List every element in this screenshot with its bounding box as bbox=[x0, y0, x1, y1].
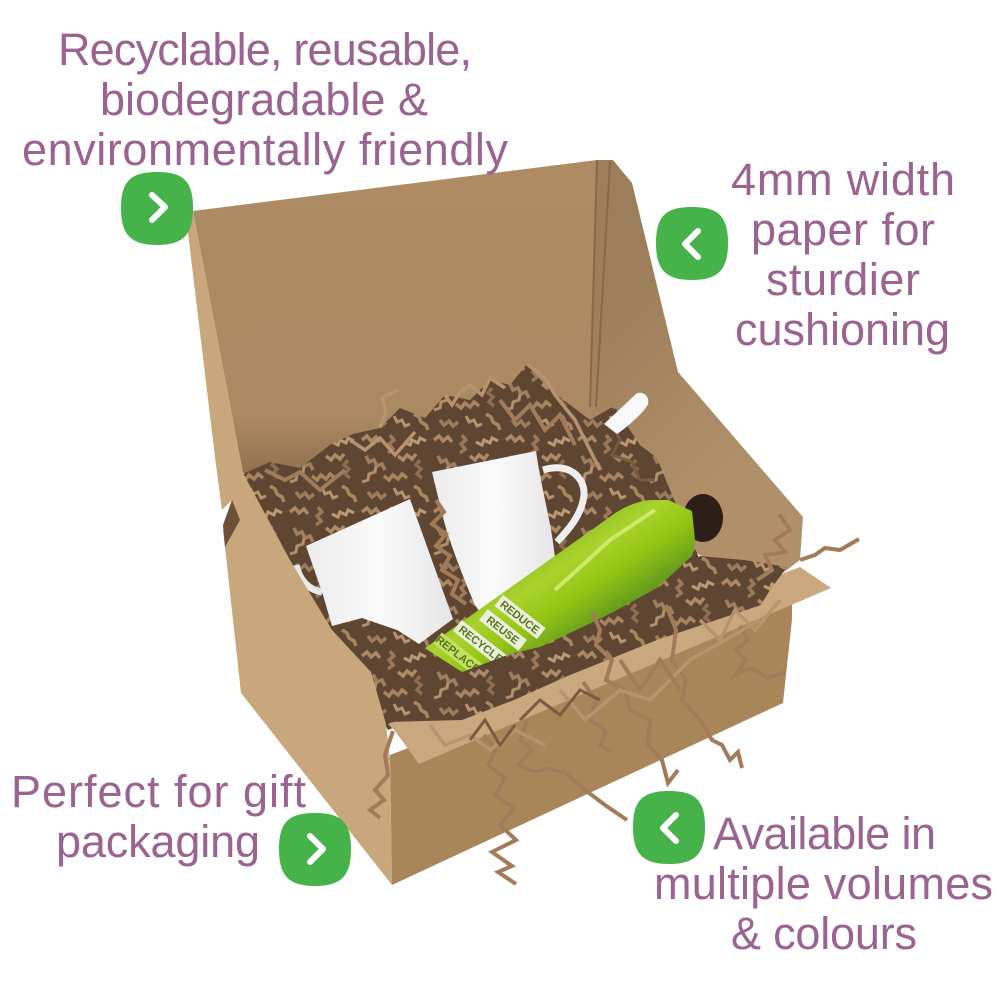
icon: arrow right bbox=[279, 813, 351, 886]
spoon handle bbox=[604, 393, 648, 434]
box front flap bbox=[388, 567, 831, 764]
bottle labels: REDUCE bbox=[497, 599, 541, 637]
callout: paper width: sturdier bbox=[766, 254, 920, 305]
side notch bbox=[223, 500, 240, 547]
box front face bbox=[390, 600, 792, 885]
loose paper strands bbox=[370, 514, 859, 884]
bottle labels: RECYCLE bbox=[456, 624, 505, 666]
bottle cap bbox=[683, 494, 723, 542]
callout: recyclable: biodegradable & bbox=[100, 74, 428, 125]
bottle labels bbox=[433, 595, 546, 676]
callout: recyclable: Recyclable, reusable, bbox=[58, 24, 472, 75]
shredded paper bed bbox=[238, 364, 740, 730]
bottle labels: REPLACE bbox=[433, 634, 482, 676]
bottle labels: REUSE bbox=[484, 614, 521, 647]
top paper strands bbox=[265, 364, 655, 490]
icon: arrow left bbox=[656, 207, 728, 280]
callout: recyclable bbox=[22, 24, 508, 175]
callout: recyclable: environmentally friendly bbox=[22, 124, 508, 175]
callout: paper width: 4mm width bbox=[731, 154, 955, 205]
green bottle bbox=[421, 500, 695, 676]
callout: volumes and colours: & colours bbox=[731, 908, 917, 959]
bottle highlight bbox=[555, 510, 655, 590]
box fold lines bbox=[590, 160, 610, 407]
callout: volumes and colours bbox=[654, 808, 993, 959]
icon: arrow left bbox=[633, 791, 705, 864]
callout: volumes and colours: Available in bbox=[713, 808, 936, 859]
front paper heap bbox=[336, 556, 787, 722]
zigzag paper between mugs bbox=[432, 500, 466, 604]
mug: rear bbox=[432, 451, 584, 620]
box left side bbox=[188, 211, 392, 885]
callout: paper width bbox=[731, 154, 955, 355]
callout: volumes and colours: multiple volumes bbox=[654, 858, 993, 909]
callout: gift packaging: packaging bbox=[56, 816, 260, 867]
callout: gift packaging bbox=[11, 766, 306, 867]
box right flap bbox=[590, 160, 803, 590]
icon: arrow right bbox=[121, 172, 193, 245]
box back panel bbox=[193, 160, 597, 480]
callout: gift packaging: Perfect for gift bbox=[11, 766, 306, 817]
mug: front bbox=[296, 499, 453, 644]
callout: paper width: cushioning bbox=[735, 304, 950, 355]
callout: paper width: paper for bbox=[751, 204, 935, 255]
